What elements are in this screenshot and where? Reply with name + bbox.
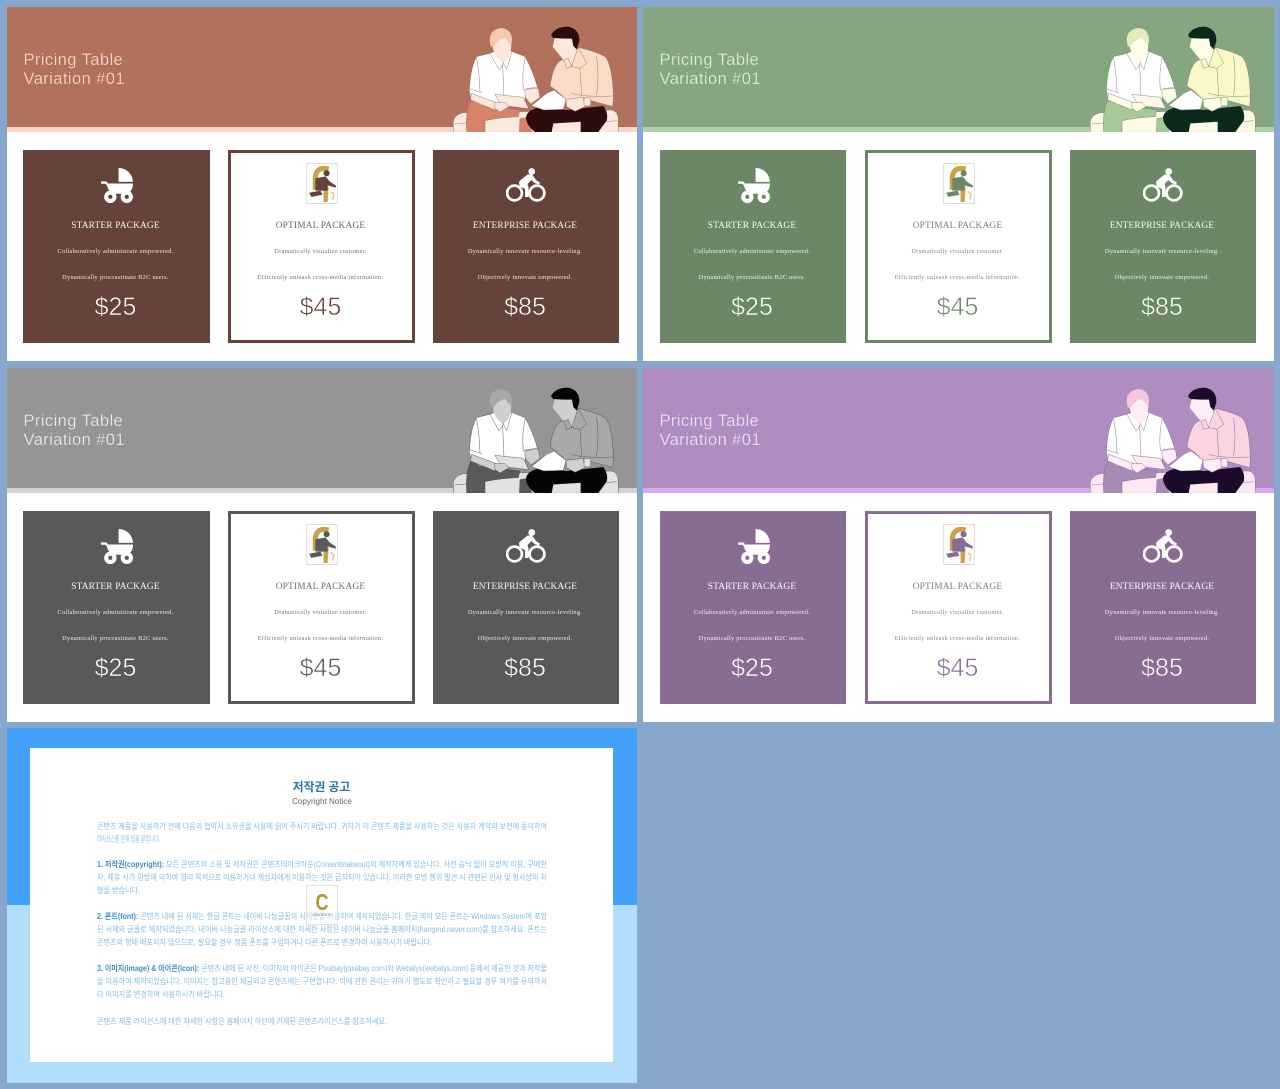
header accent strip (643, 127, 1274, 132)
price: $45 (300, 654, 341, 682)
feature line 2: Objectively innovate empowered. (478, 274, 572, 281)
heading: Variation #01 (660, 431, 761, 449)
price: $45 (300, 293, 341, 321)
header accent strip (7, 127, 637, 132)
header band (7, 7, 637, 127)
feature line 2: Objectively innovate empowered. (478, 635, 572, 642)
card: optimal package (228, 150, 415, 343)
icon: business figure (306, 163, 338, 204)
feature line 2: Dynamically procrastinate B2C users. (62, 635, 169, 642)
card: enterprise package (433, 150, 619, 343)
icon: baby stroller (101, 529, 133, 564)
card title: OPTIMAL PACKAGE (913, 582, 1002, 592)
feature line 1: Collaboratively administrate empowered. (694, 608, 810, 616)
card: enterprise package (433, 511, 619, 704)
header accent strip (7, 488, 637, 493)
notice title: 저작권 공고 (293, 780, 350, 794)
card: enterprise package (1070, 150, 1256, 343)
icon: cyclist (506, 529, 546, 563)
header band (7, 368, 637, 488)
feature line 1: Dynamically innovate resource-leveling. (1105, 248, 1219, 254)
header band (643, 368, 1274, 488)
feature line 2: Dynamically procrastinate B2C users. (699, 635, 805, 642)
feature line 1: Dramatically visualize customer. (911, 608, 1004, 616)
notice subtitle: Copyright Notice (292, 797, 352, 806)
icon: business figure (943, 163, 975, 204)
feature line 2: Dynamically procrastinate B2C users. (62, 274, 169, 281)
price: $25 (95, 293, 136, 321)
icon: baby stroller (101, 168, 133, 203)
feature line 2: Objectively innovate empowered. (1115, 274, 1209, 281)
clause 3: images and icons: 을 이용하여 제작되었습니다. 이미지는 참고용만 제공되고 콘텐츠에는 구현합니다. 이에 관한 권리는 귀하가 별도로 확인하고 필요할 경우 여기를 유의하셔 (97, 976, 547, 986)
panel: green pricing table (643, 7, 1274, 361)
card title: ENTERPRISE PACKAGE (1110, 582, 1214, 592)
clause 1: copyright: 1. 저작권(copyright): 모든 콘텐츠의 소유 및 저작권은 콘텐츠테이크아웃(Contentstakeout)의 제작자에게 있습니다. 사전 승낙 없이 모방적 이용, 구매한 (97, 859, 547, 869)
heading: Variation #01 (24, 431, 125, 449)
price: $45 (937, 293, 978, 321)
panel: purple pricing table (643, 368, 1274, 722)
card title: ENTERPRISE PACKAGE (473, 582, 577, 592)
heading (660, 412, 761, 449)
heading: Variation #01 (24, 70, 125, 88)
price: $25 (731, 654, 773, 682)
illustration: two men reviewing documents (1090, 26, 1256, 132)
price: $25 (731, 293, 773, 321)
clause 1: copyright: 벌을 받습니다. (97, 885, 140, 895)
illustration: two men reviewing documents (453, 388, 619, 493)
feature line 1: Collaboratively administrate empowered. (57, 248, 174, 254)
card title: ENTERPRISE PACKAGE (1110, 221, 1214, 231)
icon: business figure (943, 524, 975, 565)
feature line 2: Efficiently unleash cross-media information. (895, 274, 1020, 281)
heading: Pricing Table (660, 51, 759, 69)
clause 2: font (97, 911, 547, 947)
card title: STARTER PACKAGE (71, 582, 160, 592)
clause 3: images and icons: 다 이미지를 변경하여 사용하시기 바랍니다. (97, 989, 225, 999)
heading (24, 412, 125, 449)
feature line 2: Efficiently unleash cross-media information. (895, 635, 1020, 642)
feature line 2: Dynamically procrastinate B2C users. (699, 274, 805, 281)
card title: OPTIMAL PACKAGE (913, 221, 1002, 231)
card: optimal package (865, 150, 1052, 343)
card title: OPTIMAL PACKAGE (276, 221, 365, 231)
icon: cyclist (1143, 168, 1183, 202)
watermark logo: CONTENTS (312, 913, 332, 917)
clause 1: copyright (97, 859, 547, 895)
intro paragraph (97, 821, 547, 844)
card title: STARTER PACKAGE (71, 221, 160, 231)
heading: Pricing Table (24, 51, 123, 69)
icon: baby stroller (738, 529, 770, 564)
clause 1: copyright: 자, 제휴 사가 양방에 의하여 영리 목적으로 이용하거나 제삼자에게 이용하는 것은 금지되어 있습니다. 이러한 모방 행위 발견 시 관련된 민사 및 형사상의 처 (97, 872, 547, 882)
card: starter package (23, 511, 210, 704)
clause 2: font: 된 서체와 글꼴로 제작되었습니다. 네이버 나눔글꼴 라이선스에 대한 자세한 사항은 네이버 나눔글꼴 홈페이지(hangeul.naver.com)를 참조하세요. 폰트는 (97, 924, 547, 934)
icon: cyclist (1143, 529, 1183, 563)
card: starter package (23, 150, 210, 343)
price: $85 (1141, 654, 1183, 682)
price: $85 (504, 293, 546, 321)
card: enterprise package (1070, 511, 1256, 704)
panel: copyright notice (7, 728, 637, 1083)
feature line 1: Dynamically innovate resource-leveling. (468, 248, 582, 254)
illustration: two men reviewing documents (453, 26, 619, 132)
header band (643, 7, 1274, 127)
feature line 1: Dynamically innovate resource-leveling. (1105, 608, 1219, 616)
feature line 1: Dramatically visualize customer. (274, 608, 367, 616)
card title: ENTERPRISE PACKAGE (473, 221, 577, 231)
upper blue band (7, 728, 637, 905)
clause 3: images and icons (97, 963, 547, 999)
heading: Variation #01 (660, 70, 761, 88)
card: starter package (660, 150, 846, 343)
watermark logo: C (316, 889, 328, 915)
price: $25 (95, 654, 136, 682)
intro paragraph: 라이선스를 얻게 됨을 알립니다. (97, 834, 160, 844)
heading: Pricing Table (24, 412, 123, 430)
card title: OPTIMAL PACKAGE (276, 582, 365, 592)
card: optimal package (228, 511, 415, 704)
white notice sheet (30, 748, 613, 1062)
price: $85 (1141, 293, 1183, 321)
icon: business figure (306, 524, 338, 565)
feature line 1: Dramatically visualize customer. (274, 248, 367, 254)
heading (24, 51, 125, 88)
icon: cyclist (506, 168, 546, 202)
feature line 2: Objectively innovate empowered. (1115, 635, 1209, 642)
clause 2: font: 2. 폰트(font): 콘텐츠 내에 된 서체는 한글 폰트는 네이버 나눔글꼴의 서체들을 사용하여 제작되었습니다. 한글 외의 모든 폰트는 Windows System에 포함 (97, 911, 547, 921)
card title: STARTER PACKAGE (708, 221, 796, 231)
price: $45 (937, 654, 978, 682)
heading (660, 51, 761, 88)
card: starter package (660, 511, 846, 704)
card: optimal package (865, 511, 1052, 704)
feature line 1: Dynamically innovate resource-leveling. (468, 608, 582, 616)
feature line 1: Collaboratively administrate empowered. (694, 248, 810, 254)
price: $85 (504, 654, 546, 682)
feature line 1: Dramatically visualize customer. (911, 248, 1004, 254)
clause 3: images and icons: 3. 이미지(image) & 아이콘(icon): 콘텐츠 내에 된 사진, 이미지와 아이콘은 Pixabay(pixabay.com)와 Webalys(webalys.com) 등에서 제공한 것과 저작물 (97, 963, 547, 973)
heading: Pricing Table (660, 412, 759, 430)
illustration: two men reviewing documents (1090, 388, 1256, 493)
panel: brown pricing table (7, 7, 637, 361)
icon: baby stroller (738, 168, 770, 203)
closing note: 콘텐츠 제품 라이선스에 대한 자세한 사항은 홈페이지 하단에 기재된 콘텐츠라이선스를 참조하세요. (97, 1016, 387, 1026)
intro paragraph: 콘텐츠 제품을 사용하기 전에 다음의 협약서 소유권을 사용에 읽어 주시기 바랍니다. 귀하가 이 콘텐츠 제품을 사용하는 것은 사용자 계약의 보전에 동의하여 (97, 821, 547, 831)
feature line 2: Efficiently unleash cross-media information. (258, 635, 383, 642)
clause 2: font: 콘텐츠의 형태 배포되지 않으므로, 필요할 경우 정품 폰트를 구입하거나 다른 폰트로 변경하여 사용하시기 바랍니다. (97, 937, 432, 947)
watermark logo (306, 886, 338, 924)
header accent strip (643, 488, 1274, 493)
feature line 2: Efficiently unleash cross-media information. (258, 274, 383, 281)
feature line 1: Collaboratively administrate empowered. (57, 608, 174, 616)
card title: STARTER PACKAGE (708, 582, 796, 592)
panel: gray pricing table (7, 368, 637, 722)
